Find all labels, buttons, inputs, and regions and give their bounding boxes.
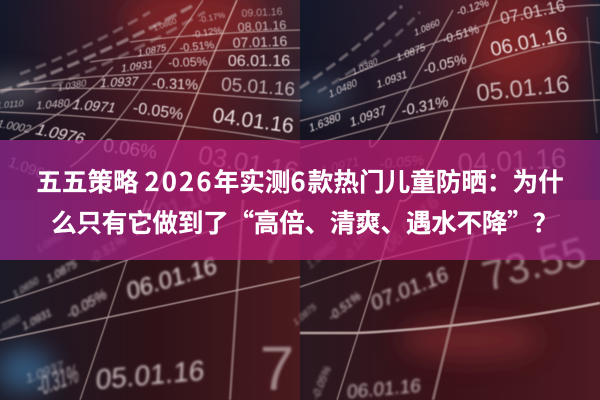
right panel numbers: -0.05% xyxy=(422,50,467,77)
left panel numbers: 1.0380 xyxy=(57,78,87,94)
bottom right numbers: -0.12% xyxy=(341,224,374,265)
left panel numbers: 1.0860 xyxy=(152,16,178,33)
left panel numbers: -0.12% xyxy=(191,25,223,41)
panel: right photo bottom xyxy=(300,200,600,400)
right panel numbers: 06.01.16 xyxy=(488,23,569,61)
left panel numbers: 1.0875 xyxy=(138,42,166,60)
right panel numbers: 1.0937 xyxy=(349,102,387,130)
bottom right numbers: -0.51% xyxy=(327,288,363,325)
bottom left numbers: 06.01.16 xyxy=(125,252,219,306)
bottom right numbers xyxy=(292,191,591,400)
right panel numbers: 1.0875 xyxy=(396,42,426,64)
left panel numbers xyxy=(0,6,301,186)
bottom right numbers: 1.0860 xyxy=(305,236,339,273)
bottom right numbers: 07.01.16 xyxy=(369,263,450,316)
title: 么只有它做到了“高倍、清爽、遇水不降”？ xyxy=(51,203,558,240)
left panel numbers: -0.31% xyxy=(152,76,198,94)
left panel numbers: 1.0976 xyxy=(32,121,88,148)
bottom left numbers: 1.0937 xyxy=(26,358,64,386)
panel: right photo top xyxy=(300,0,600,200)
bottom left numbers: 1.0650 xyxy=(12,275,40,301)
magenta title band xyxy=(0,140,600,260)
right panel numbers: 1.0971 xyxy=(321,153,359,179)
right panel numbers: 04.01.16 xyxy=(457,143,567,179)
bottom left numbers: -0.05% xyxy=(66,286,109,324)
left panel numbers: 1.0931 xyxy=(120,59,154,75)
left panel numbers: 04.01.16 xyxy=(211,104,295,138)
left panel numbers: 05.01.16 xyxy=(220,74,296,101)
left panel numbers: -0.05% xyxy=(132,100,184,124)
bottom left numbers: 1.0931 xyxy=(21,306,53,333)
left panel numbers: -0.51% xyxy=(179,39,215,55)
left panel numbers: 0.06% xyxy=(102,135,158,164)
left panel numbers: 1.0971 xyxy=(70,97,118,116)
bottom left numbers: 07.01.16 xyxy=(125,182,214,235)
title: 五五策略 2026年实测6款热门儿童防晒：为什 xyxy=(36,162,564,199)
right panel numbers: 05.01.16 xyxy=(475,71,571,107)
left panel numbers: 1.0480 xyxy=(35,97,71,112)
left panel numbers: 1.0969 xyxy=(6,154,55,185)
bottom left numbers: 05.01.16 xyxy=(95,355,205,395)
left panel numbers: 09.01.16 xyxy=(241,6,283,20)
bottom right numbers: 06.01.16 xyxy=(381,191,442,257)
panel: left photo bottom xyxy=(0,200,300,400)
left panel numbers: 06.01.16 xyxy=(228,53,290,70)
bottom left numbers: -0.51% xyxy=(88,231,128,267)
right panel numbers: -0.31% xyxy=(401,93,449,120)
bottom right numbers: 1.0875 xyxy=(292,301,317,328)
bottom left numbers xyxy=(0,182,294,400)
title xyxy=(36,162,564,240)
left panel numbers: -0.05% xyxy=(168,55,208,70)
bottom left numbers: 7 xyxy=(260,221,286,274)
right panel numbers: -0.05% xyxy=(380,152,425,172)
left panel numbers: 03.01.16 xyxy=(196,139,301,186)
right panel numbers: -0.51% xyxy=(442,21,480,47)
bottom left numbers: 1.0860 xyxy=(35,230,65,256)
left panel numbers: 07.01.16 xyxy=(232,33,288,51)
right panel numbers: 1.0380 xyxy=(352,56,378,77)
right panel numbers xyxy=(309,0,571,179)
left panel numbers: -0.17% xyxy=(198,9,226,25)
far-row number streaks xyxy=(0,6,420,92)
right panel numbers: 1.0931 xyxy=(376,68,408,91)
left panel numbers: 08.01.16 xyxy=(237,18,287,35)
bottom right numbers: 73.55 xyxy=(477,227,591,300)
panel: left photo top xyxy=(0,0,300,200)
bottom left numbers: 1.0875 xyxy=(46,258,78,286)
right panel numbers: 1.0480 xyxy=(328,77,358,101)
left panel numbers: 1.0937 xyxy=(99,73,140,90)
right panel numbers: 1.6380 xyxy=(309,111,341,135)
right panel numbers: 1.0860 xyxy=(414,17,440,38)
